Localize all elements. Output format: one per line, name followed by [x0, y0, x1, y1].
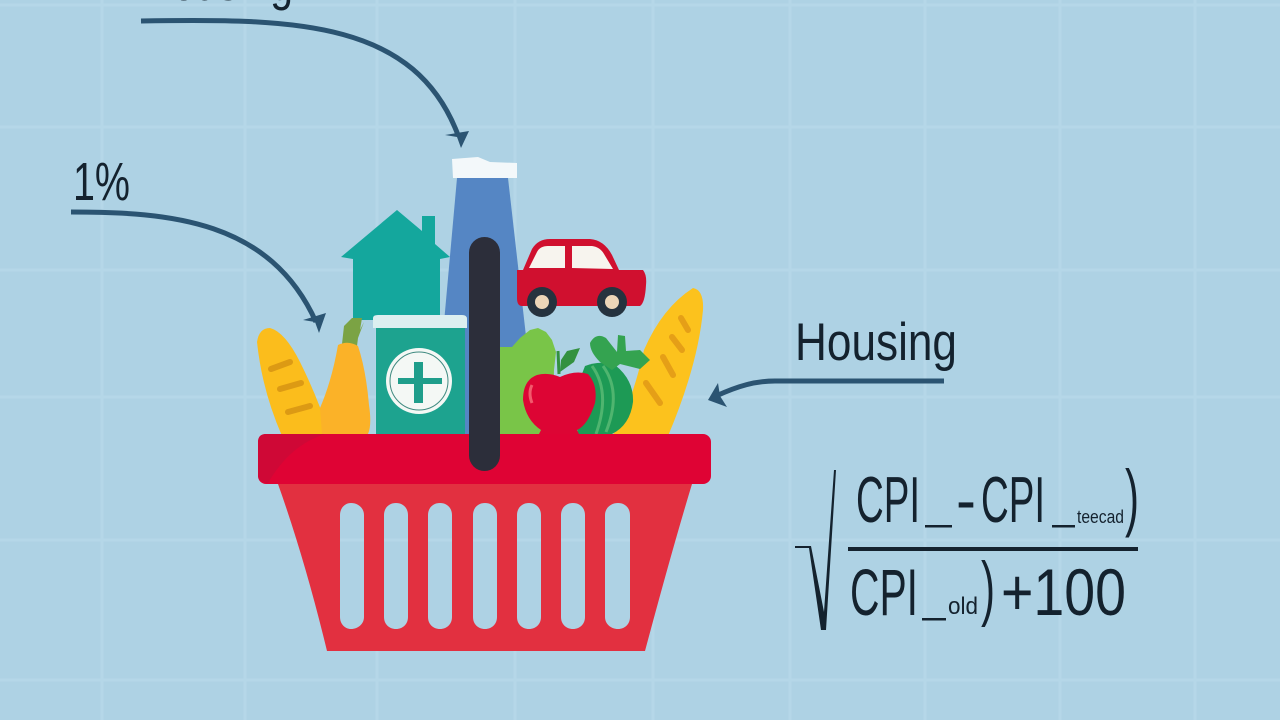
arrow: top label to tower: [141, 20, 469, 148]
label: Housing: Housing: [795, 313, 957, 372]
formula: [795, 455, 1139, 630]
label: 1%: 1%: [73, 152, 130, 212]
arrow: 1% to basket: [71, 212, 326, 333]
numerator: CPI: [856, 463, 920, 536]
arrow: Housing to basket: [708, 381, 944, 407]
formula: ): [981, 549, 995, 628]
formula: ): [1125, 455, 1139, 538]
basket handle: [469, 237, 500, 471]
formula: CPI: [981, 463, 1045, 536]
formula: -: [956, 463, 976, 536]
icon: apple: [523, 348, 596, 436]
denominator: CPI: [850, 555, 918, 629]
formula: +100: [1001, 555, 1126, 629]
fraction bar: [848, 547, 1138, 551]
icon: lettuce: [500, 328, 556, 436]
icon: left bread: [257, 328, 330, 436]
radical sign: [795, 470, 836, 630]
formula: teecad: [1077, 507, 1124, 527]
icon: house: [341, 210, 450, 320]
basket: [258, 237, 711, 651]
basket body: [278, 484, 692, 651]
icon: watermelon: [572, 335, 650, 434]
basket contents: [257, 157, 703, 436]
icon: right bread: [612, 288, 703, 436]
basket rim: [258, 434, 711, 484]
icon: carrot: [320, 318, 370, 434]
formula: old: [948, 593, 978, 620]
icon: medicine box: [373, 315, 467, 434]
icon: car: [517, 239, 646, 317]
icon: tower: [442, 157, 527, 436]
